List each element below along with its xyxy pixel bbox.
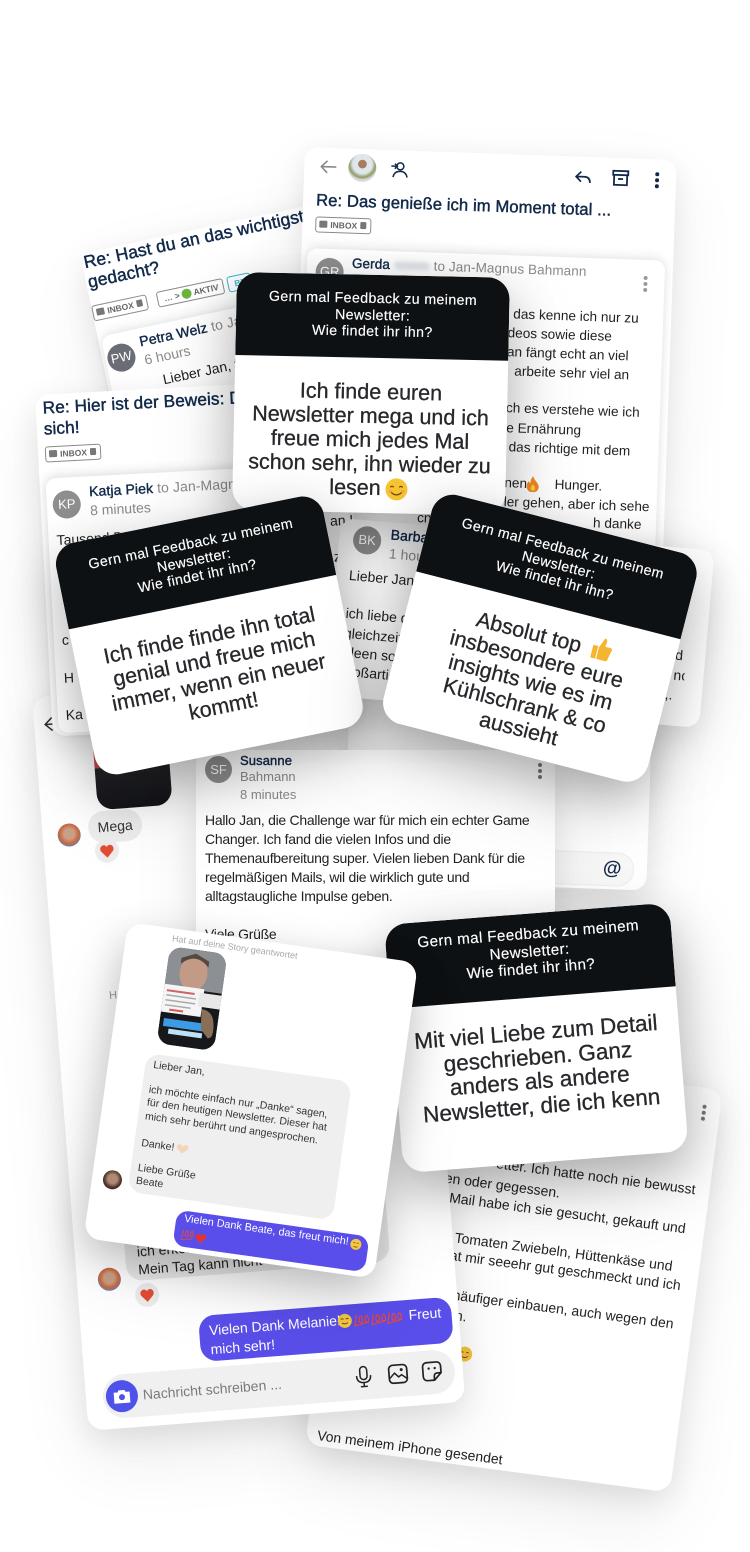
- time: 1 hour: [388, 545, 429, 565]
- label: inbox: [91, 294, 149, 321]
- bubble: Mega: Mega: [97, 817, 133, 835]
- menu dots: [644, 276, 648, 280]
- answer text: [101, 602, 328, 725]
- icon: sticker: [422, 1361, 442, 1382]
- label: teal tag: BE: [233, 276, 247, 288]
- message text: an fängt echt an viel: [507, 344, 629, 363]
- avatar GR: GR: [320, 264, 340, 279]
- time: 6 hours: [143, 342, 192, 368]
- panel: email Re: Hier ist der Beweis: [35, 379, 364, 737]
- message text: das richtige mit dem: [508, 439, 630, 459]
- answer text: Newsletter, die ich kenn: [422, 1084, 661, 1128]
- message text: [417, 306, 650, 532]
- message card: c: [61, 632, 69, 648]
- email text: etter. Ich hatte noch nie bewusst: [495, 1155, 697, 1197]
- icon: assign person: [391, 162, 408, 178]
- email text: t Tomaten Zwiebeln, Hüttenkäse und: [446, 1228, 674, 1274]
- avatar photo: [348, 154, 377, 182]
- email text: Von meinem iPhone gesendet: [316, 1427, 504, 1467]
- label: aktiv: [156, 278, 225, 308]
- icon: heart hands: [177, 1144, 188, 1154]
- answer text: kommt!: [187, 687, 261, 725]
- gray message bubble: ich erkenne: [136, 1238, 210, 1260]
- subject heading: Re: Hast du an das wichtigste: [82, 204, 315, 272]
- label: inbox: INBOX: [330, 220, 357, 231]
- question header: Newsletter:: [335, 307, 410, 324]
- reaction: heart: [134, 1282, 160, 1308]
- message text: gleichzeiti: [343, 625, 406, 646]
- placeholder text: Nachricht schreiben ...: [142, 1376, 282, 1403]
- gray message bubble: [115, 1102, 390, 1281]
- message text: Hallo Jan, die Challenge war für mich ein echter Game Changer. Ich fand die vielen Infos und die Themenaufbereitung super. Vielen lieben Dank für die regelmäßigen Mails, wil die wirklich gute und alltagstaugliche Impulse geben. Viele Grüße: [205, 812, 529, 942]
- question header: Newsletter:: [156, 545, 232, 576]
- gray message bubble: mich sehr berührt und angesprochen.: [144, 1110, 319, 1147]
- answer text: Kühlschrank & co: [441, 673, 609, 738]
- panel: feedback card Mit viel Liebe: [384, 903, 689, 1173]
- menu dots: [538, 763, 542, 767]
- answer text: insights wie es im: [446, 650, 615, 715]
- message text: [340, 567, 689, 703]
- answer text: [248, 378, 491, 500]
- toolbar: [320, 154, 660, 188]
- sender: Petra Welz to Jan: [138, 310, 251, 349]
- icon: more: [655, 172, 659, 176]
- answer text: Mit viel Liebe zum Detail: [413, 1010, 658, 1054]
- label: teal tag: [226, 272, 253, 293]
- panel: email card, bottom right: [305, 1042, 723, 1493]
- answer text: immer, wenn ein neuer: [110, 649, 328, 716]
- answer text: aussieht: [477, 707, 560, 750]
- answer text: Ich finde finde ihn total: [101, 602, 317, 669]
- icon: hundred and heart: [180, 1230, 206, 1244]
- icon: back arrow: [44, 717, 53, 732]
- avatar: [57, 823, 82, 847]
- icon: reply: [575, 171, 591, 183]
- avatar: [102, 1169, 123, 1191]
- message text: h danke: [593, 515, 642, 532]
- icon: image: [388, 1364, 408, 1384]
- message text: e Ernährung: [506, 420, 581, 438]
- gray message bubble: ich möchte einfach nur „Danke“ sagen,: [148, 1084, 328, 1121]
- email text: en oder gegessen.: [444, 1170, 561, 1201]
- answer text: Absolut top: [474, 607, 584, 657]
- message text: Lieber Jan, für: [161, 353, 252, 387]
- answer text: [441, 607, 626, 750]
- label: inbox: [315, 216, 371, 234]
- icon: emoji row: [338, 1312, 402, 1328]
- message text: Tausend Dank: [56, 527, 146, 548]
- answer text: geschrieben. Ganz: [443, 1037, 633, 1076]
- menu dots: [702, 1105, 707, 1109]
- message text: das kenne ich nur zu: [513, 306, 639, 326]
- avatar KP: KP: [58, 496, 76, 512]
- answer text: schon sehr, ihn wieder zu: [248, 449, 491, 478]
- message text: Ideen soo: [342, 644, 404, 665]
- question header: Newsletter:: [489, 940, 570, 963]
- avatar BK: [352, 525, 382, 556]
- email text: Mail habe ich sie gesucht, gekauft und: [448, 1189, 687, 1236]
- message text: d: [675, 647, 684, 663]
- panel: email Re: Das geniesse ich: [290, 147, 677, 590]
- label: aktiv: … > AKTIV: [163, 282, 220, 303]
- question header: Gern mal Feedback zu meinem: [460, 515, 666, 583]
- gray message bubble: Danke!: [141, 1137, 175, 1154]
- avatar KP: [52, 490, 81, 519]
- question header: Wie findet ihr ihn?: [312, 323, 433, 341]
- panel: feedback card center: [232, 272, 510, 516]
- icon: smile emoji: [386, 478, 408, 500]
- icon: camera: [105, 1379, 139, 1413]
- gray message bubble: Liebe Grüße: [137, 1162, 197, 1182]
- subject heading: gedacht?: [86, 257, 161, 292]
- label: inbox: INBOX: [60, 447, 87, 459]
- message input bar: [101, 1349, 457, 1420]
- question header: Gern mal Feedback zu meinem: [87, 516, 294, 573]
- answer text: genial und freue mich: [111, 627, 317, 691]
- bubble: Mega: [87, 808, 143, 844]
- icon: smile emoji: [461, 1346, 472, 1362]
- sender: Barbara: [390, 526, 442, 547]
- purple reply bubble: [198, 1297, 454, 1362]
- email text: häufiger einbauen, auch wegen den: [452, 1287, 675, 1332]
- answer text: insbesondere eure: [447, 625, 626, 693]
- subject heading: [42, 382, 342, 439]
- answer text: freue mich jedes Mal: [271, 426, 469, 454]
- icon: thumbs up: [590, 638, 612, 662]
- panel: feedback card right: [378, 490, 701, 786]
- message card: [45, 463, 360, 733]
- sender: Susanne: [240, 753, 292, 768]
- message card: zi: [333, 548, 344, 565]
- time: 8 minutes: [240, 787, 296, 802]
- message card: Ka: [65, 706, 83, 723]
- message text: arbeite sehr viel an: [514, 363, 629, 382]
- message text: ler gehen, aber ich sehe: [503, 494, 650, 514]
- avatar BK: BK: [358, 532, 376, 548]
- message text: deos sowie diese: [507, 325, 612, 344]
- sender: Gerda to Jan-Magnus Bahmann: [352, 256, 587, 279]
- avatar GR: [315, 257, 344, 286]
- label: inbox: INBOX: [106, 300, 135, 315]
- subject heading: sich!: [43, 417, 80, 439]
- time: 8 minutes: [90, 499, 151, 518]
- message text: nc: [673, 667, 689, 684]
- answer text: [413, 1010, 661, 1128]
- email text: n.: [454, 1307, 468, 1324]
- email text: [316, 1155, 697, 1467]
- avatar: [97, 1267, 122, 1292]
- gray message bubble: Lieber Jan,: [153, 1059, 206, 1078]
- purple reply bubble: mich sehr!: [210, 1336, 276, 1357]
- message text: cn: [417, 510, 432, 526]
- icon: fire: [526, 476, 539, 492]
- question header: Newsletter:: [520, 548, 597, 582]
- panel: story reply from Beate: [84, 922, 418, 1279]
- question header: Wie findet ihr ihn?: [137, 557, 258, 597]
- question header: Gern mal Feedback zu meinem: [417, 917, 640, 951]
- caption: Hat auf deine Story geantwortet: [171, 933, 298, 961]
- panel: instagram chat: [32, 668, 465, 1431]
- panel: email from Barbara: [325, 518, 715, 728]
- message text: ,.: [664, 686, 673, 703]
- icon: back: [320, 160, 336, 174]
- question header: Wie findet ihr ihn?: [466, 956, 596, 983]
- answer text: Newsletter mega und ich: [252, 401, 489, 430]
- message card: [101, 270, 436, 444]
- story photo: [92, 727, 173, 810]
- reaction: heart: [94, 838, 120, 864]
- message text: ch es verstehe wie ich: [506, 400, 640, 420]
- email text: at mir seeehr gut geschmeckt und ich: [449, 1247, 682, 1293]
- purple reply bubble: Vielen Dank Beate, das freut mich!: [183, 1213, 350, 1248]
- message text: ich liebe d: [345, 605, 409, 626]
- message text: nen Hunger.: [504, 475, 602, 494]
- avatar SF: SF: [210, 762, 227, 777]
- gray message bubble: Beate: [135, 1175, 164, 1190]
- label: inbox: [45, 444, 101, 463]
- message card: an !: [330, 512, 354, 529]
- panel: email Susanne: [196, 750, 555, 980]
- answer text: anders als andere: [449, 1062, 630, 1101]
- icon: microphone: [356, 1366, 372, 1388]
- subject heading: Re: Das genieße ich im Moment total ...: [316, 190, 612, 220]
- purple reply bubble: [172, 1210, 370, 1272]
- message card: H: [63, 669, 74, 686]
- question header: [52, 493, 336, 629]
- gray message bubble: Mein Tag kann nicht: [138, 1252, 263, 1278]
- icon: smile emoji: [350, 1238, 362, 1250]
- gray message bubble: für den heutigen Newsletter. Dieser hat: [146, 1096, 328, 1134]
- text: Hat auf deine Story: H: [109, 989, 118, 1002]
- question header: [235, 272, 510, 361]
- answer text: lesen: [329, 475, 381, 500]
- recipient: Bahmann: [240, 769, 296, 784]
- icon: at sign: @: [603, 858, 622, 880]
- avatar PW: [105, 341, 138, 374]
- message text: großartig: [340, 663, 397, 683]
- sender: Katja Piek to Jan-Magnus: [89, 475, 251, 499]
- question header: Gern mal Feedback zu meinem: [269, 289, 477, 309]
- avatar PW: PW: [110, 348, 133, 367]
- story photo: [158, 948, 226, 1050]
- input bar: [343, 843, 634, 887]
- panel: feedback card left: [52, 493, 367, 778]
- gray message bubble: [127, 1053, 352, 1220]
- purple reply bubble: Vielen Dank Melanie! Freut: [208, 1304, 442, 1338]
- panel: email Re: Hast du an das wichtigste gedacht: [80, 183, 450, 430]
- message card: [296, 248, 665, 589]
- avatar SF: [205, 756, 232, 783]
- panel: message panel with at-sign input: [343, 690, 653, 890]
- message text: Lieber Jan,: [348, 567, 419, 589]
- subject heading: Re: Hier ist der Beweis: Das spricht für: [42, 382, 342, 418]
- answer text: Ich finde euren: [300, 378, 442, 405]
- question header: [384, 903, 676, 1009]
- question header: [416, 490, 701, 639]
- question header: Wie findet ihr ihn?: [494, 559, 615, 604]
- icon: archive: [612, 170, 630, 186]
